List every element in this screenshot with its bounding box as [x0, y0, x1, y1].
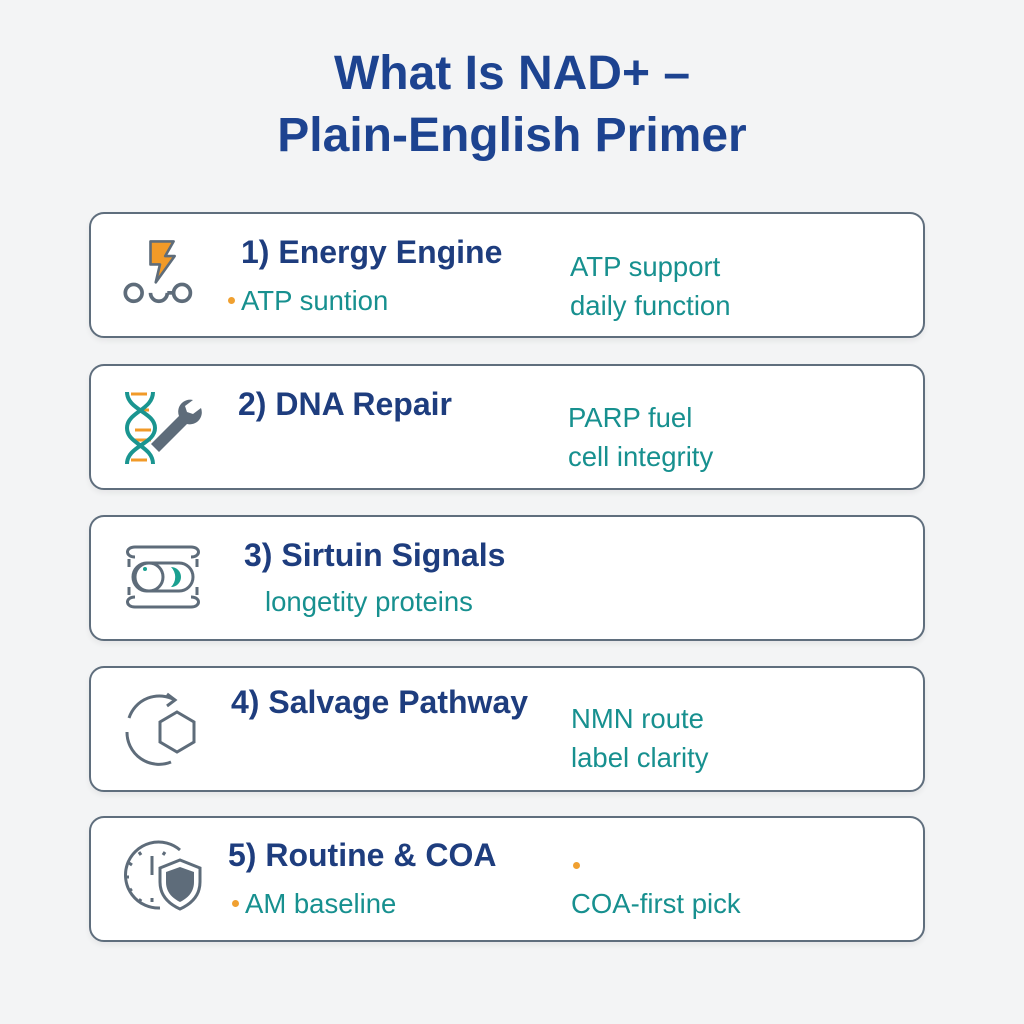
heading: DNA repair: 2) DNA Repair	[238, 386, 452, 422]
panel: DNA repair	[89, 364, 925, 490]
text: NMN route	[571, 703, 709, 773]
text: COA-first pick: COA-first pick	[571, 888, 741, 919]
icon: energy	[123, 240, 192, 304]
heading: routine & COA: 5) Routine & COA	[228, 837, 496, 873]
text: ATP support	[570, 251, 731, 321]
panel: salvage pathway	[89, 666, 925, 792]
heading: sirtuin signals: 3) Sirtuin Signals	[244, 537, 505, 573]
text: PARP fuel: PARP fuel	[568, 402, 692, 433]
icon: salvage cycle	[126, 692, 196, 766]
text: NMN route: label clarity	[571, 742, 709, 773]
panel: energy engine	[89, 212, 925, 338]
icon: sirtuin	[126, 546, 200, 608]
text: NMN route: NMN route	[571, 703, 704, 734]
panel: sirtuin signals	[89, 515, 925, 641]
text: ATP support: ATP support	[570, 251, 720, 282]
panel: routine & COA	[89, 816, 925, 942]
heading: energy engine: 1) Energy Engine	[241, 234, 502, 270]
icon: DNA wrench	[125, 392, 202, 464]
icon: orange dot	[573, 862, 580, 869]
title: What Is NAD+ –	[334, 47, 690, 100]
icon: clock shield	[124, 840, 202, 911]
title: Plain-English Primer	[277, 109, 747, 162]
text: ATP support: daily function	[570, 290, 731, 321]
text: ATP suntion: ATP suntion	[241, 285, 388, 316]
text: PARP fuel: cell integrity	[568, 441, 713, 472]
text: AM baseline: AM baseline	[245, 888, 396, 919]
text: PARP fuel	[568, 402, 714, 472]
text: longetity proteins: longetity proteins	[265, 586, 473, 617]
heading: salvage pathway: 4) Salvage Pathway	[231, 684, 528, 720]
title	[277, 47, 747, 162]
